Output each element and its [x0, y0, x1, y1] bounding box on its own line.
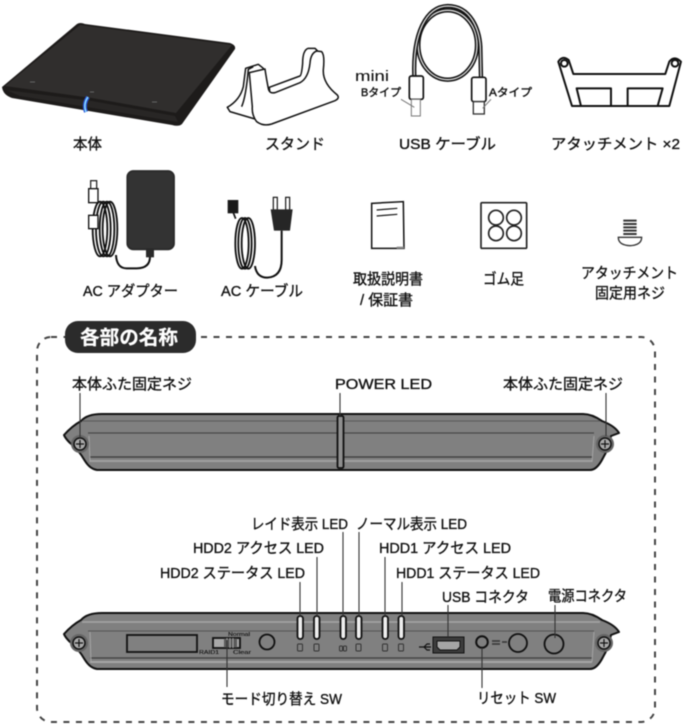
callout: power connector: 電源コネクタ	[548, 588, 627, 605]
callout: HDD1 access LED: HDD1 アクセス LED	[379, 540, 511, 557]
callout: HDD2 access LED	[193, 540, 324, 616]
mode switch: Clear	[233, 650, 251, 656]
screw: right	[596, 435, 614, 453]
heading: part names	[65, 321, 196, 353]
item: USB cable	[355, 6, 532, 153]
mode switch	[199, 632, 251, 656]
item: stand	[227, 48, 338, 153]
USB symbol	[419, 644, 431, 650]
callout: HDD2 status LED: HDD2 ステータス LED	[160, 565, 305, 582]
display window	[127, 635, 197, 652]
label: stand: スタンド	[265, 136, 325, 153]
power connector	[544, 634, 564, 654]
reset button	[476, 636, 488, 648]
label: attachment x2: アタッチメント ×2	[551, 136, 680, 153]
callout: HDD1 access LED	[379, 540, 511, 616]
icon: attachment bracket	[558, 58, 681, 106]
icon: main unit device	[2, 23, 235, 126]
callout: reset switch	[477, 648, 557, 707]
callout: reset switch: リセット SW	[477, 690, 557, 707]
power LED bar	[338, 416, 344, 468]
item: AC adapter	[83, 171, 178, 300]
label: main unit: 本体	[73, 136, 102, 153]
label: mini: mini	[355, 68, 389, 85]
USB port	[433, 637, 464, 653]
callout: HDD2 access LED: HDD2 アクセス LED	[193, 540, 324, 557]
callout: right lid screw: 本体ふた固定ネジ	[503, 376, 623, 393]
icon: screw	[618, 221, 642, 246]
item: rubber feet	[481, 203, 527, 288]
label: manual: 取扱説明書	[353, 271, 423, 288]
icon: stand	[227, 48, 338, 125]
callout: HDD1 status LED: HDD1 ステータス LED	[396, 565, 540, 582]
callout: power connector	[548, 588, 627, 638]
dashed panel border	[37, 337, 655, 722]
device: rear view	[64, 613, 619, 669]
callout: USB connector: USB コネクタ	[442, 589, 529, 606]
callout: mode switch	[221, 640, 343, 708]
icon: rubber feet sheet	[481, 203, 527, 248]
icon: manual	[372, 202, 404, 248]
heading: part names: 各部の名称	[80, 326, 178, 349]
icon: USB cable	[401, 6, 491, 116]
panel: part names	[37, 321, 655, 722]
item: main unit	[2, 23, 235, 153]
callout: left lid screw: 本体ふた固定ネジ	[72, 376, 192, 393]
callout: normal LED: ノーマル表示 LED	[356, 516, 467, 533]
label: USB cable: USB ケーブル	[399, 135, 496, 153]
callout: left lid screw	[72, 376, 192, 438]
callout: raid LED	[251, 516, 348, 616]
label: AC cable: AC ケーブル	[221, 282, 303, 300]
LED indicators	[298, 616, 404, 639]
screw: left	[71, 435, 89, 453]
callout: USB connector	[442, 589, 529, 637]
mode switch: RAID1	[199, 650, 219, 656]
callout: raid LED: レイド表示 LED	[251, 516, 348, 533]
label: attachment: アタッチメント	[581, 265, 678, 282]
label: fixing screw: 固定用ネジ	[595, 285, 665, 302]
round port	[509, 634, 527, 652]
item: AC cable	[221, 197, 303, 300]
round button	[260, 634, 274, 650]
icon: AC cable	[228, 197, 293, 278]
callout: mode switch: モード切り替え SW	[221, 691, 343, 708]
device: front view	[64, 414, 619, 470]
item: manual and warranty	[353, 202, 423, 309]
screw: left	[70, 634, 88, 652]
callout: power LED	[335, 376, 432, 416]
label: rubber feet: ゴム足	[483, 270, 524, 288]
item: attachment screw	[581, 221, 678, 302]
screw: right	[595, 634, 613, 652]
callout: normal LED	[356, 516, 467, 616]
label: B type: Bタイプ	[361, 86, 401, 99]
mode switch: Normal	[228, 632, 250, 638]
item: attachment	[551, 58, 681, 153]
icon: AC adapter	[89, 171, 174, 268]
label: warranty: / 保証書	[360, 292, 413, 309]
power symbols	[492, 641, 507, 644]
label: AC adapter: AC アダプター	[83, 283, 178, 300]
label: A type: Aタイプ	[489, 86, 532, 99]
callout: power LED: POWER LED	[335, 376, 432, 393]
callout: right lid screw	[503, 376, 623, 436]
LED icons	[298, 644, 404, 651]
